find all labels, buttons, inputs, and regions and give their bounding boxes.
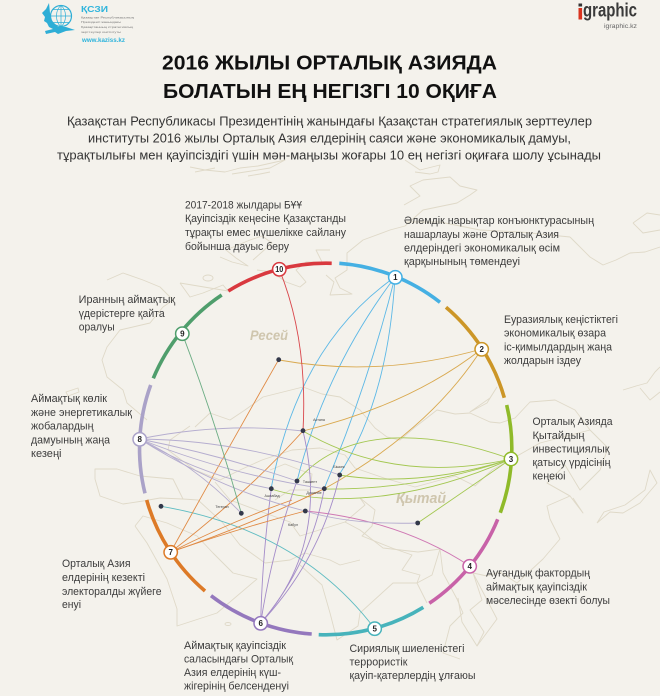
country label: Russia: Ресей (250, 327, 288, 343)
label: event 10: 2017-2018 жылдары БҰҰ (185, 200, 302, 212)
lines from event 8 (140, 428, 418, 523)
logo name: ҚСЗИ (81, 4, 108, 14)
node 1 (389, 271, 402, 284)
label: event 6: Азия елдерінің күш- (184, 667, 281, 679)
subtitle text block (57, 114, 601, 162)
label: event 8: жобалардың (31, 421, 94, 433)
node 10: 10 (275, 265, 284, 274)
logo url: www.kaziss.kz (81, 37, 126, 44)
segment 5 (319, 607, 423, 635)
icon: flame i (578, 4, 582, 20)
city dots (159, 357, 420, 525)
node 2 (475, 343, 488, 356)
node 5 (368, 622, 381, 635)
node 6: 6 (258, 619, 263, 628)
label: event 8 (31, 393, 132, 460)
label: event 9 (79, 294, 175, 334)
background map of Eurasia (66, 160, 660, 659)
node 5: 5 (372, 625, 377, 634)
brand url: igraphic.kz (604, 23, 637, 30)
node 8: 8 (137, 435, 142, 444)
title: БОЛАТЫН ЕҢ НЕГІЗГІ 10 ОҚИҒА (163, 80, 497, 103)
label: event 8: кезеңі (31, 448, 62, 460)
segment 6 (211, 596, 312, 634)
label: event 6: саласындағы Орталық (184, 654, 293, 666)
lines from event 6 (261, 431, 340, 623)
label: event 1: Әлемдік нарықтар конъюнктурасының (404, 215, 594, 227)
label: event 9: оралуы (79, 322, 115, 334)
segment 3 (500, 405, 512, 513)
label: event 9: Иранның аймақтық (79, 294, 175, 306)
node 8 (133, 433, 146, 446)
city labels: Ташкент (303, 480, 317, 484)
subtitle text block: институты 2016 жылы Орталық Азия елдерінің саяси және экономикалық дамуы, (88, 132, 571, 146)
label: event 7: электоралды жүйеге (62, 586, 162, 598)
label: event 3: инвестициялық (532, 444, 610, 456)
connection lines (140, 269, 511, 629)
brand name: graphic (583, 0, 637, 22)
city labels: Кабул (288, 523, 298, 527)
logo description: зерттеулер институты (81, 30, 121, 34)
lines from event 7 (171, 360, 324, 552)
subtitle text block: тұрақтылығы мен қауіпсіздігі үшін мән-маңызы жоғары 10 ең негізгі оқиғаға шолу ұсынады (57, 148, 601, 162)
label: event 5: қауіп-қатерлердің ұлғаюы (350, 670, 476, 682)
label: event 4: аймақтық қауіпсіздік (486, 581, 587, 593)
line from event 4 (305, 511, 470, 566)
logo description: Қазақстан Республикасының (81, 16, 134, 20)
line from event 9 (182, 334, 241, 513)
segment 1 (339, 263, 440, 302)
label: event 3 (532, 416, 612, 483)
title (162, 52, 497, 103)
node 10 (273, 263, 286, 276)
label: event 10: тұрақты емес мүшелікке сайлану (185, 227, 347, 239)
label: event 6: жігерінің белсенденуі (184, 680, 289, 692)
segment 10 (228, 263, 332, 291)
label: event 6 (184, 640, 293, 692)
label: event 2: жолдарын іздеу (504, 355, 582, 367)
lines from event 1 (271, 277, 395, 489)
label: event 1: елдеріндегі экономикалық өсім (404, 242, 560, 254)
segment 7 (147, 500, 205, 591)
logo: igraphic (578, 0, 637, 30)
label: event 7 (62, 558, 162, 611)
label: event 2: іс-қимылдардың жаңа (504, 342, 612, 354)
label: event 5: террористік (350, 657, 408, 669)
label: event 8: және энергетикалық (31, 407, 132, 419)
node 7 (164, 546, 177, 559)
city labels: Бішкек (333, 465, 345, 469)
label: event 1: қарқынының төмендеуі (404, 256, 520, 268)
label: event 4: мәселесінде өзекті болуы (486, 595, 610, 607)
title: 2016 ЖЫЛЫ ОРТАЛЫҚ АЗИЯДА (162, 52, 497, 74)
line from event 5 (161, 506, 375, 629)
node 1: 1 (393, 273, 398, 282)
label: event 3: қатысу үрдісінің (532, 457, 611, 469)
label: event 2: экономикалық өзара (504, 328, 606, 340)
node 2: 2 (479, 345, 484, 354)
segment 2 (446, 307, 504, 398)
label: event 1: нашарлауы және Орталық Азия (404, 229, 559, 241)
segment 9 (153, 295, 222, 378)
label: event 10: бойынша дауыс беру (185, 241, 290, 253)
line from event 10 (279, 269, 304, 431)
label: event 5: Сириялық шиеленістегі (350, 643, 464, 655)
label: event 1 (404, 215, 594, 268)
city labels: Ашхабад (264, 494, 280, 498)
segment 4 (429, 519, 498, 603)
node 9: 9 (180, 330, 185, 339)
label: event 4 (486, 568, 610, 607)
logo description: Президенті жанындағы (81, 20, 121, 24)
node 6 (254, 617, 267, 630)
label: event 7: енуі (62, 599, 81, 611)
logo description (81, 16, 134, 34)
segment 8 (140, 385, 151, 493)
label: event 5 (350, 643, 476, 682)
node 4: 4 (467, 562, 472, 571)
label: event 3: кеңеюі (532, 471, 566, 483)
label: event 7: елдерінің кезекті (62, 572, 145, 584)
label: event 8: Аймақтық көлік (31, 393, 107, 405)
node 3: 3 (509, 455, 514, 464)
node 7: 7 (168, 548, 173, 557)
label: event 10 (185, 200, 347, 253)
subtitle text block: Қазақстан Республикасы Президентінің жанындағы Қазақстан стратегиялық зерттеулер (67, 114, 592, 128)
label: event 3: Орталық Азияда (532, 416, 612, 428)
label: event 8: дамуының жаңа (31, 434, 110, 446)
icon: eagle and globe (42, 3, 75, 34)
lines from event 2 (279, 349, 482, 489)
node 3 (504, 452, 518, 466)
ring of events (140, 263, 512, 635)
label: event 6: Аймақтық қауіпсіздік (184, 640, 286, 652)
label: event 10: Қауіпсіздік кеңесіне Қазақстанды (185, 213, 346, 225)
lines from event 3 (271, 431, 511, 523)
city dots and labels (159, 357, 420, 527)
label: event 2: Еуразиялық кеңістіктегі (504, 314, 618, 326)
city labels: Астана (313, 418, 325, 422)
city labels (215, 418, 345, 527)
logo: KazISS (42, 3, 134, 44)
label: event 7: Орталық Азия (62, 558, 131, 570)
city labels: Тегеран (215, 505, 229, 509)
label: event 9: үдерістерге қайта (79, 308, 165, 320)
label: event 3: Қытайдың (532, 430, 585, 442)
city labels: Душанбе (306, 491, 322, 495)
logo description: Қазақстанның стратегиялық (81, 25, 134, 29)
node 9 (176, 327, 189, 340)
country label: China: Қытай (396, 490, 446, 507)
label: event 4: Ауғандық фактордың (486, 568, 590, 580)
label: event 2 (504, 314, 618, 367)
node 4 (463, 560, 476, 573)
